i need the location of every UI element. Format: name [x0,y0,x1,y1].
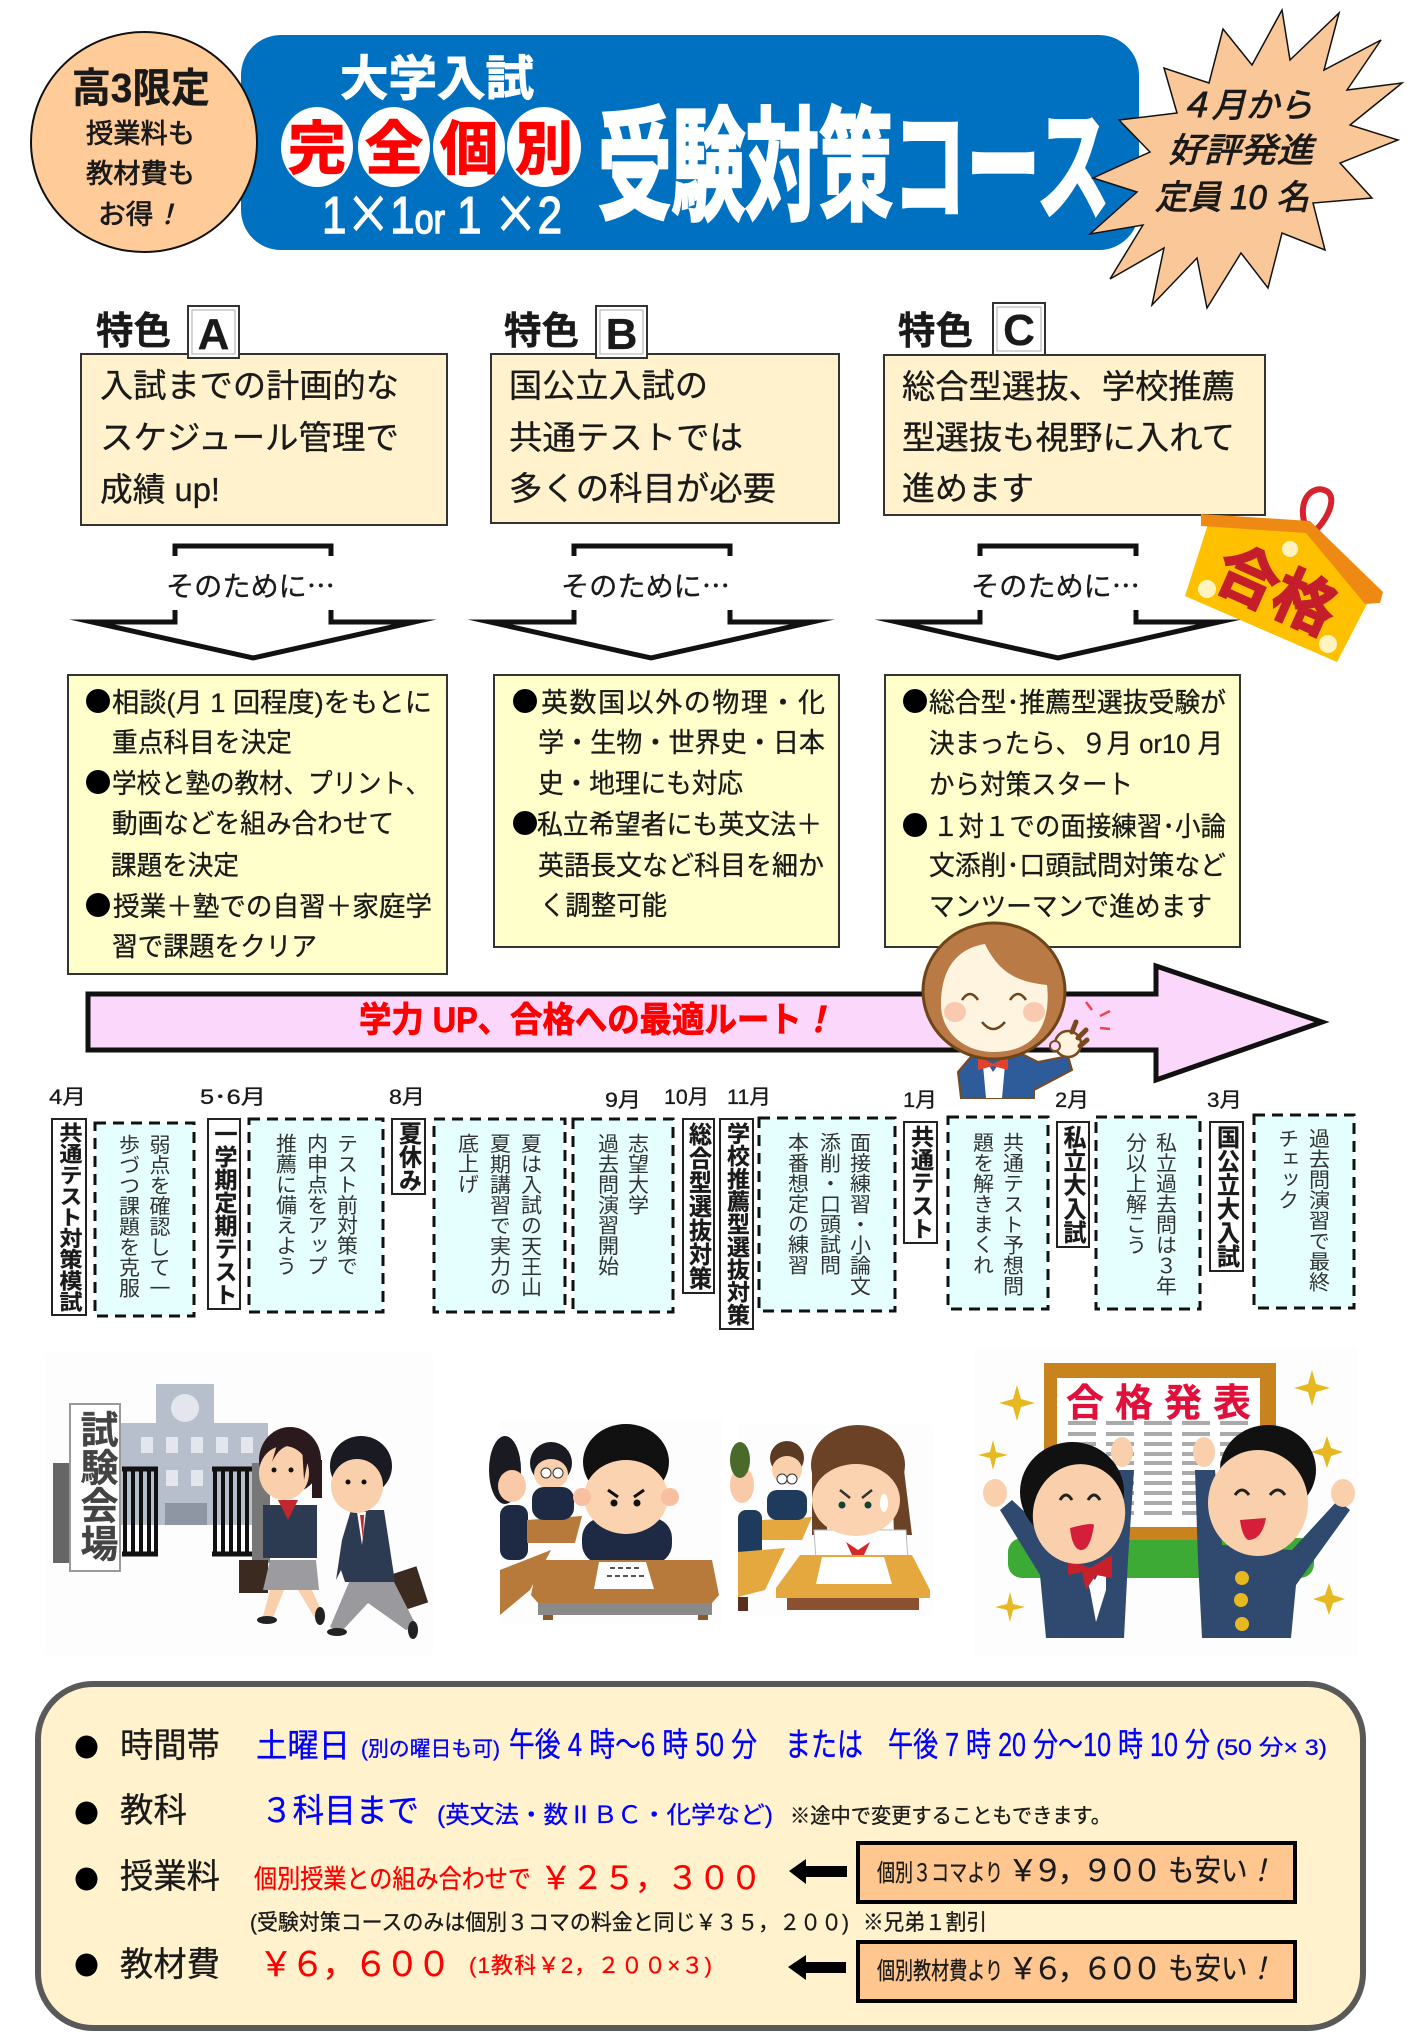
timeline month labels: 9月 [605,1089,641,1112]
callout: tuition saving: 個別３コマより [877,1860,1003,1887]
detail panel A: 相談(月 1 回程度)をもとに [112,688,432,718]
arrow: tuition saving [789,1859,847,1884]
badge: 高3限定: お得！ [98,200,181,230]
row: subjects: ３科目まで [261,1792,419,1829]
feature panel B: 多くの科目が必要 [509,470,776,507]
feature panel C [884,355,1265,515]
banner kicker: 大学入試: 大学入試 [340,53,534,106]
detail panel A: 授業＋塾での自習＋家庭学 [113,892,432,922]
icon: ema plaque 合格: 合格 [1205,535,1346,648]
row: time slots: (別の曜日も可) [361,1738,500,1761]
feature heading B: B [606,310,637,359]
feature panel A: 成績 up! [100,471,220,508]
detail panel C: １対１での面接練習･小論 [933,812,1226,842]
detail panel C: 文添削･口頭試問対策など [929,851,1226,881]
timeline note boxes: 推薦に備えよう [274,1133,297,1276]
timeline event boxes: 学校推薦型選抜対策 [724,1122,750,1326]
detail panel C: から対策スタート [929,770,1133,800]
row: tuition: (受験対策コースのみは個別３コマの料金と同じ￥３５，２００) [250,1910,849,1935]
icon: girl making OK sign [923,923,1110,1098]
timeline note boxes: 弱点を確認して一 [147,1134,170,1298]
badge circles: 完全個別: 別 [515,117,573,182]
detail panel B: 学・生物・世界史・日本 [538,728,825,758]
timeline month labels [49,1086,1242,1112]
timeline event boxes: 私立大入試 [1060,1125,1086,1244]
detail panel C: 総合型･推薦型選抜受験が [929,688,1226,718]
feature panel C: 型選抜も視野に入れて [902,419,1235,456]
timeline note boxes: 志望大学 [626,1133,649,1215]
timeline event boxes: 国公立大入試 [1214,1125,1240,1268]
timeline event boxes [52,1119,1243,1329]
row: subjects: (英文法・数ⅡＢＣ・化学など) [437,1802,773,1829]
detail panel A: 習で課題をクリア [112,932,317,962]
timeline note boxes: 内申点をアップ [304,1133,328,1276]
feature heading A: A [198,310,229,359]
row: materials fee: (1教科￥2，２００×３) [469,1953,712,1978]
timeline event boxes: 共通テスト対策模試 [56,1122,82,1312]
callout: materials saving [858,1942,1295,2001]
badge circles: 完全個別: 個 [440,117,498,182]
row: time slots: 午後 7 時 20 分～10 時 10 分 [888,1726,1210,1763]
illustration: students celebrating at results board [975,1347,1358,1657]
detail panel B: 英語長文など科目を細か [538,851,824,881]
row: tuition: 授業料 [120,1858,220,1896]
feature heading A [96,306,239,359]
badge: 高3限定 [31,32,257,252]
row: time slots [76,1726,1327,1765]
detail panel C [885,675,1240,947]
row: time slots: 午後 4 時～6 時 50 分 [509,1726,757,1763]
arrow B: そのために: そのために… [561,565,730,605]
feature heading B: 特色 [504,311,579,353]
timeline month labels: 2月 [1055,1089,1089,1112]
feature heading C [898,303,1045,355]
feature panel A [81,354,447,525]
callout: tuition saving: ￥９，９００ [1008,1855,1162,1888]
detail panel A: 重点科目を決定 [112,728,292,758]
starburst: 4月から好評発進 定員10名 [1090,10,1402,308]
class ratio: 1×1 or 1×2: 1×1or 1 ×2 [322,172,562,248]
feature panel B: 国公立入試の [509,367,708,404]
timeline note boxes: 私立過去問は３年 [1154,1132,1177,1296]
row: time slots: 時間帯 [120,1727,220,1765]
timeline note boxes: 添削・口頭試問 [818,1132,841,1275]
row: time slots: (50 分× 3) [1216,1735,1327,1760]
detail panel A [68,675,447,974]
detail panel B: く調整可能 [540,891,667,921]
timeline note boxes: 共通テスト予想問 [1000,1132,1024,1296]
arrow A: そのために [92,546,414,658]
badge circles: 完全個別: 全 [365,117,423,182]
detail panel A: 学校と塾の教材、プリント、 [112,769,430,799]
timeline event boxes: 夏休み [396,1121,422,1192]
row: time slots: 土曜日 [256,1727,350,1764]
row: materials fee [76,1946,712,1984]
detail panel C: マンツーマンで進めます [929,892,1212,922]
illustration: students walking to the exam hall [45,1353,433,1655]
icon: ema plaque 合格 [1185,489,1383,662]
feature panel C: 進めます [902,470,1034,507]
detail panel A: 動画などを組み合わせて [112,809,394,839]
timeline note boxes: 歩づつ課題を克服 [116,1134,140,1298]
timeline note boxes: 本番想定の練習 [786,1132,809,1275]
detail panel A: 課題を決定 [111,851,239,881]
timeline note boxes: 分以上解こう [1124,1132,1147,1255]
route arrow [88,966,1322,1080]
row: subjects: 教科 [120,1792,187,1830]
detail panel B: 史・地理にも対応 [538,769,743,799]
callout: materials saving: ￥６，６００ [1008,1953,1162,1986]
illustration: students walking to the exam hall: 試験会場 [74,1410,118,1562]
row: tuition: 個別授業との組み合わせで [254,1864,531,1894]
timeline note boxes: 過去問演習で最終 [1306,1128,1330,1292]
badge: 高3限定: 教材費も [86,159,195,189]
row: materials fee: 教材費 [120,1946,220,1984]
feature heading B [504,306,647,359]
row: tuition: ※兄弟１割引 [863,1910,987,1935]
timeline month labels: 10月 [664,1086,709,1109]
arrow A: そのために: そのために… [166,565,335,605]
row: subjects [76,1792,1111,1830]
timeline month labels: 1月 [903,1089,937,1112]
timeline note boxes: 面接練習・小論文 [848,1132,871,1296]
row: materials fee: ￥６，６００ [259,1946,451,1984]
feature panel C: 総合型選抜、学校推薦 [902,368,1235,405]
timeline month labels: 5･6月 [200,1086,266,1109]
arrow B: そのために [490,546,812,658]
callout: materials saving: 個別教材費より [877,1958,1003,1985]
badge circles: 完全個別: 完 [288,117,346,182]
detail panel B: 私立希望者にも英文法＋ [537,810,822,840]
timeline note boxes: 底上げ [456,1133,479,1194]
badge circles: 完全個別 [281,107,581,187]
timeline month labels: 3月 [1207,1089,1242,1112]
main title: 受験対策コース: 受験対策コース [598,101,1110,237]
arrow C: そのために: そのために… [971,565,1140,605]
callout: materials saving: も安い！ [1168,1953,1274,1986]
row: subjects: ※途中で変更することもできます。 [790,1805,1111,1828]
detail panel B [494,675,839,947]
row: tuition: ￥２５，３００ [540,1860,762,1896]
timeline event boxes: 総合型選抜対策 [686,1122,712,1290]
illustration: students celebrating at results board: 合格発表 [1066,1383,1251,1425]
starburst: 4月から好評発進 定員10名: 好評発進 [1168,132,1317,170]
row: time slots: または [785,1726,863,1763]
timeline note boxes: チェック [1276,1128,1298,1210]
timeline note boxes: 夏は入試の天王山 [518,1133,542,1297]
callout: tuition saving: も安い！ [1168,1855,1274,1888]
callout: tuition saving [858,1843,1295,1902]
starburst: 4月から好評発進 定員10名: ４月から [1178,87,1313,125]
info panel [38,1684,1363,2028]
feature panel A: 入試までの計画的な [100,367,399,404]
route arrow: 学力 UP、合格への最適ルート！ [359,1001,834,1040]
badge: 高3限定: 授業料も [86,119,195,149]
timeline note boxes: テスト前対策で [334,1133,358,1276]
illustration: girl taking the exam [730,1425,933,1615]
feature heading C: C [1003,306,1035,355]
timeline note boxes: 夏期講習で実力の [488,1133,511,1297]
feature panel B [491,354,839,523]
feature heading C: 特色 [898,311,973,353]
timeline month labels: 4月 [49,1086,86,1109]
timeline note boxes: 題を解きまくれ [970,1132,994,1275]
arrow C: そのために [897,546,1219,658]
timeline note boxes [95,1115,1354,1316]
feature heading A: 特色 [96,311,171,353]
row: tuition [76,1858,987,1935]
feature panel B: 共通テストでは [509,419,743,456]
timeline note boxes: 過去問演習開始 [596,1133,619,1276]
arrow: materials saving [788,1955,846,1980]
detail panel C: 決まったら、９月 or10 月 [929,729,1223,759]
starburst: 4月から好評発進 定員10名: 定員 10 名 [1155,179,1309,217]
timeline event boxes: 一学期定期テスト [211,1122,238,1306]
timeline month labels: 8月 [389,1086,425,1109]
detail panel B: 英数国以外の物理・化 [541,688,825,718]
badge: 高3限定: 高3限定 [72,66,210,111]
header banner [241,35,1139,250]
feature panel A: スケジュール管理で [100,419,399,456]
timeline month labels: 11月 [727,1086,771,1109]
illustration: boy taking the exam [489,1420,722,1625]
timeline event boxes: 共通テスト [908,1125,934,1240]
